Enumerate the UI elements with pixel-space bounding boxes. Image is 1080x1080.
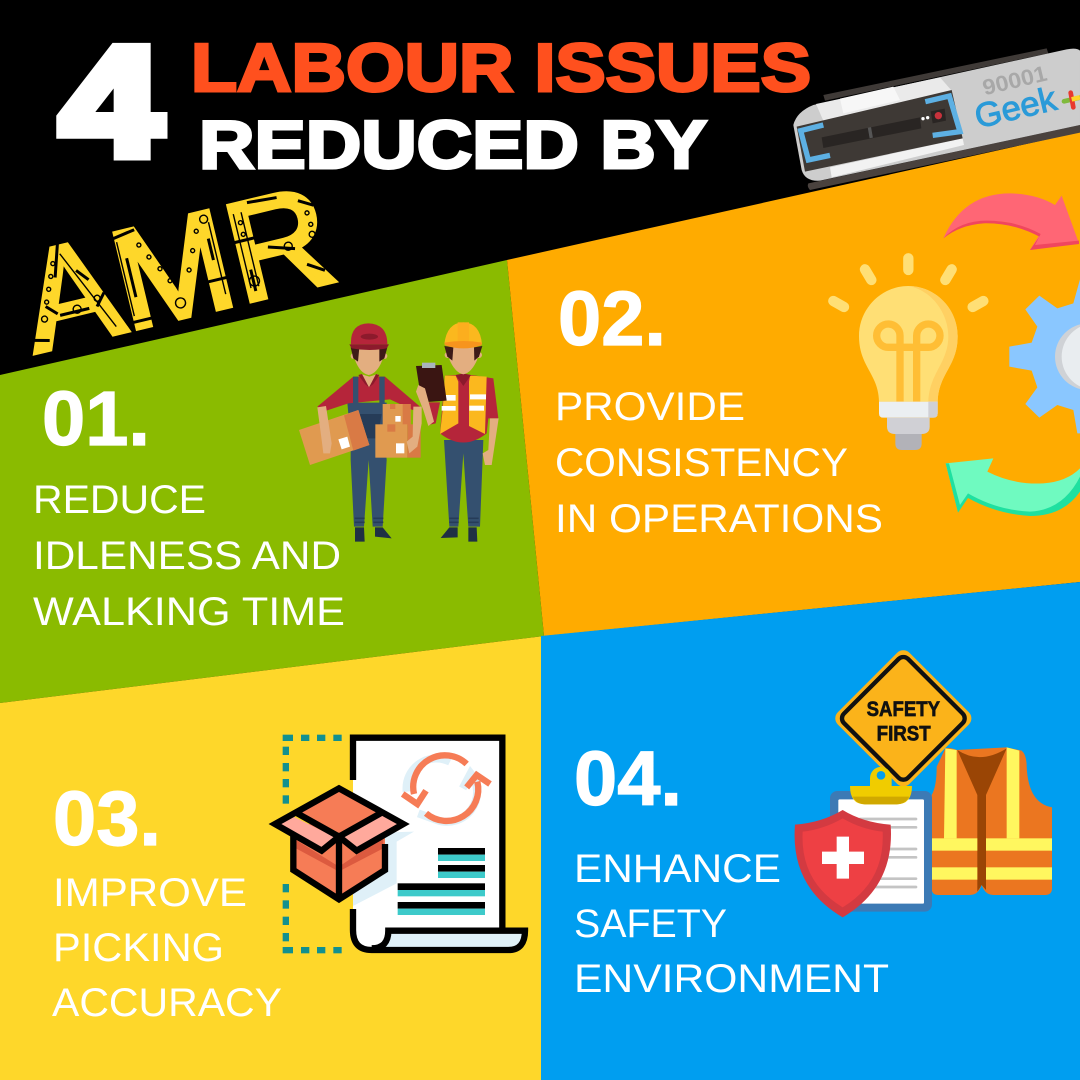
description 03: IMPROVE (53, 871, 247, 915)
issue 04 text (574, 736, 889, 1001)
icon: red curved arrow (943, 193, 1079, 250)
number 02: 02. (558, 276, 666, 362)
icon: consistency cycle with bulb, gear and arrows (833, 193, 1080, 516)
title numeral 4: 4 (60, 15, 162, 188)
description 03: PICKING (53, 926, 224, 970)
description 02: PROVIDE (555, 385, 745, 429)
icon: safety first sign (832, 647, 975, 790)
icon: package and document (275, 735, 525, 953)
description 02 (555, 385, 883, 541)
issue 02 text (555, 276, 883, 541)
worker with clipboard (416, 322, 499, 542)
description 04 (574, 847, 889, 1001)
sign text: first: FIRST (877, 722, 931, 746)
icon: safety equipment (795, 647, 1052, 917)
panel: green issue 01 background (0, 260, 544, 703)
description 04: ENVIRONMENT (574, 957, 889, 1001)
icon: clipboard (830, 767, 932, 912)
issue 03 text (52, 776, 282, 1025)
description 01: IDLENESS AND (33, 534, 341, 578)
description 02: IN OPERATIONS (555, 497, 883, 541)
AMR mechanical lettering: AMR (6, 156, 346, 381)
icon: light bulb (833, 258, 983, 450)
description 03 (52, 871, 282, 1025)
description 04: SAFETY (574, 902, 727, 946)
description 01 (33, 478, 345, 634)
title line: reduced by: REDUCED BY (199, 107, 707, 183)
icon: green curved arrow (946, 458, 1080, 516)
description 03: ACCURACY (52, 981, 282, 1025)
icon: open box (275, 788, 403, 899)
icon: medical shield (795, 810, 891, 917)
number 03: 03. (53, 776, 161, 862)
description 01: WALKING TIME (33, 590, 345, 634)
number 04: 04. (574, 736, 682, 822)
sign text: safety: SAFETY (867, 697, 940, 721)
dotted teal frame (283, 735, 342, 953)
icon: sync arrows (403, 755, 490, 822)
AMR robot illustration (793, 48, 1080, 190)
description 01: REDUCE (33, 478, 206, 522)
issue 01 text (33, 376, 345, 634)
title (60, 15, 811, 188)
panel: yellow issue 03 background (0, 636, 544, 1080)
icon: two warehouse workers (299, 322, 499, 542)
panel: blue issue 04 background (541, 582, 1080, 1080)
worker with boxes (299, 323, 422, 542)
description 04: ENHANCE (574, 847, 781, 891)
description 02: CONSISTENCY (555, 441, 848, 485)
icon: blue gear (1009, 279, 1080, 433)
title line: labour issues: LABOUR ISSUES (191, 30, 811, 106)
panel: orange issue 02 background (507, 132, 1080, 636)
number 01: 01. (42, 376, 150, 462)
icon: safety vest (932, 747, 1052, 895)
robot label 90001: 90001 (980, 61, 1049, 100)
robot brand Geek+: Geek (971, 80, 1061, 136)
document sheet (353, 737, 525, 950)
